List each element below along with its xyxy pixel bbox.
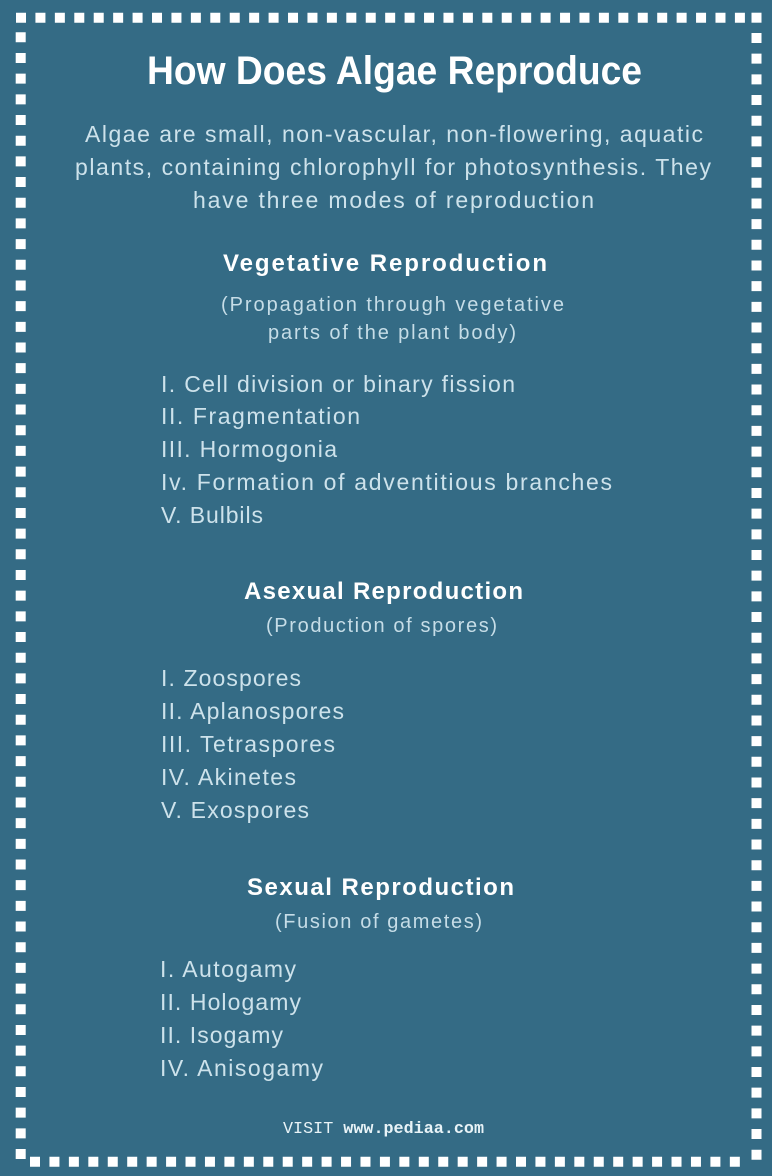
description: sexual reproduction: (Fusion of gametes) xyxy=(275,911,482,933)
list: asexual methods xyxy=(161,665,344,823)
title: How Does Algae Reproduce xyxy=(147,49,642,93)
list: vegetative methods: III. Hormogonia xyxy=(161,436,337,462)
intro paragraph: have three modes of reproduction xyxy=(193,187,594,213)
list: vegetative methods: V. Bulbils xyxy=(161,502,263,528)
list: sexual methods: IV. Anisogamy xyxy=(160,1055,324,1081)
heading: asexual reproduction: Asexual Reproduction xyxy=(244,578,523,605)
description: vegetative reproduction xyxy=(221,294,564,344)
list: asexual methods: IV. Akinetes xyxy=(161,764,296,790)
intro paragraph xyxy=(75,121,712,213)
list: asexual methods: V. Exospores xyxy=(161,797,309,823)
description: vegetative reproduction: (Propagation through vegetative xyxy=(221,294,564,316)
section: sexual reproduction xyxy=(160,874,514,1081)
list: asexual methods: II. Aplanospores xyxy=(161,698,344,724)
list: vegetative methods: II. Fragmentation xyxy=(161,403,360,429)
heading: sexual reproduction: Sexual Reproduction xyxy=(247,874,514,901)
heading: vegetative reproduction: Vegetative Reproduction xyxy=(223,250,547,277)
list: sexual methods: II. Hologamy xyxy=(160,989,302,1015)
list: vegetative methods: Iv. Formation of adventitious branches xyxy=(161,469,612,495)
list: sexual methods: I. Autogamy xyxy=(160,956,296,982)
description: vegetative reproduction: parts of the plant body) xyxy=(268,322,516,344)
list: vegetative methods xyxy=(161,371,612,528)
footer: website credit: VISIT www.pediaa.com xyxy=(283,1120,484,1139)
list: asexual methods: III. Tetraspores xyxy=(161,731,335,757)
section: asexual reproduction xyxy=(161,578,523,823)
list: sexual methods: II. Isogamy xyxy=(160,1022,284,1048)
list: vegetative methods: I. Cell division or binary fission xyxy=(161,371,515,397)
intro paragraph: Algae are small, non-vascular, non-flowering, aquatic xyxy=(85,121,703,147)
list: sexual methods xyxy=(160,956,324,1081)
list: asexual methods: I. Zoospores xyxy=(161,665,301,691)
section: vegetative reproduction xyxy=(161,250,612,528)
description: asexual reproduction: (Production of spores) xyxy=(266,615,497,637)
intro paragraph: plants, containing chlorophyll for photosynthesis. They xyxy=(75,154,712,180)
